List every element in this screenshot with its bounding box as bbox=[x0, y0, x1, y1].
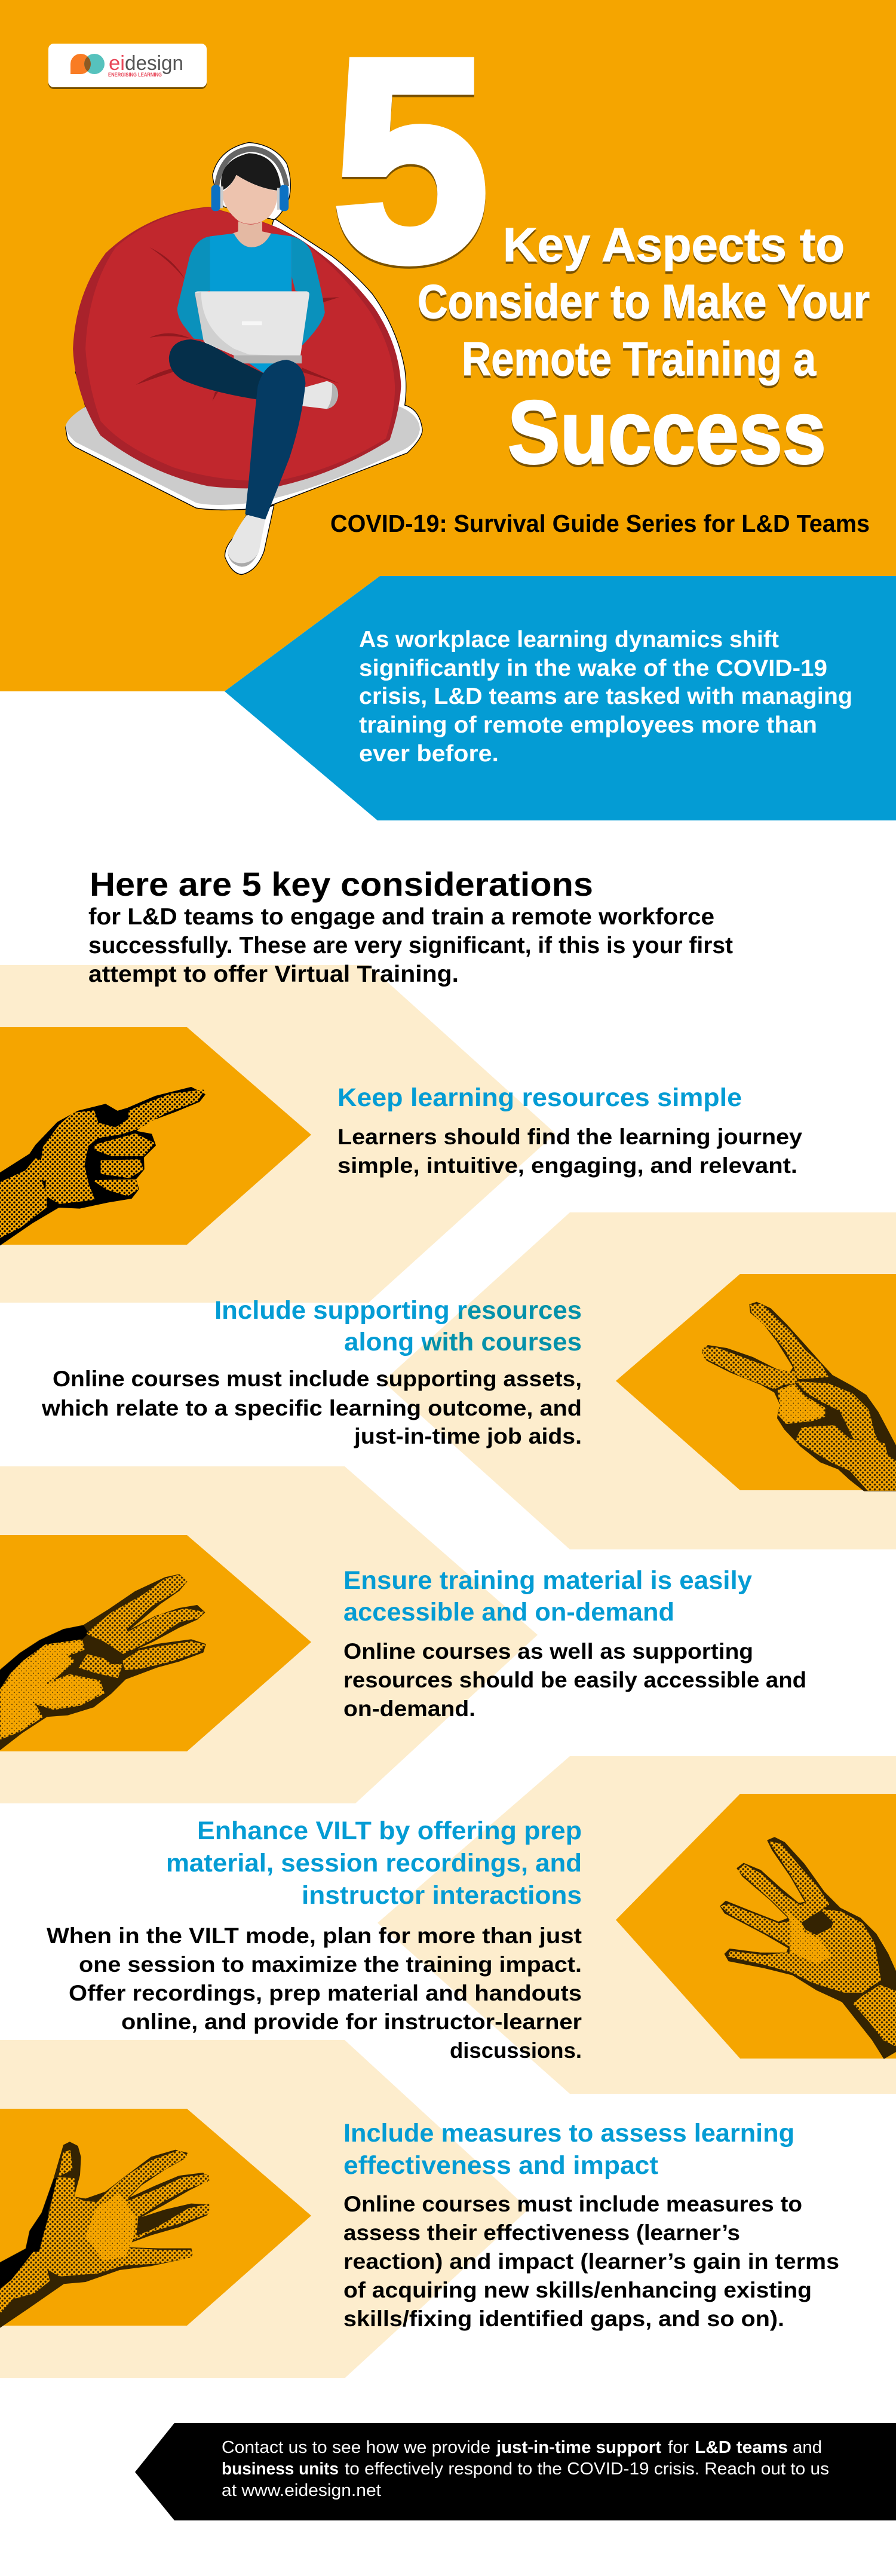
panel: item 4 orange chevron with hand bbox=[616, 1794, 896, 2059]
heading: Include measures to assess learning bbox=[343, 2119, 794, 2148]
heading: Ensure training material is easily bbox=[343, 1566, 752, 1595]
panel: footer call to action bbox=[135, 2423, 896, 2520]
icon: open hand with four fingers bbox=[720, 1837, 896, 2059]
heading: instructor interactions bbox=[302, 1881, 582, 1910]
panel: intro blue banner bbox=[225, 576, 896, 820]
body: When in the VILT mode, plan for more than just bbox=[47, 1923, 582, 1948]
chevron: item 4 background bbox=[378, 1756, 896, 2094]
logo: ENERGISING LEARNING bbox=[108, 72, 162, 78]
panel: item 3 orange chevron with hand bbox=[0, 1535, 311, 1751]
intro text: attempt to offer Virtual Training. bbox=[88, 961, 459, 987]
panel: footer call to action: L&D teams bbox=[695, 2438, 788, 2457]
panel: item 5 orange chevron with hand bbox=[0, 2109, 311, 2327]
intro text bbox=[88, 904, 733, 987]
body: Online courses must include measures to bbox=[343, 2192, 802, 2216]
body: resources should be easily accessible and bbox=[343, 1668, 806, 1692]
title bbox=[332, 0, 870, 482]
title line 4: Success: Success bbox=[508, 382, 826, 482]
illustration: person on bean bag with laptop bbox=[65, 142, 422, 575]
icon: open hand with thumb bbox=[0, 2142, 209, 2327]
subtitle: COVID-19: Survival Guide Series for L&D Teams bbox=[330, 510, 870, 537]
body: on-demand. bbox=[343, 1696, 475, 1721]
panel: intro blue banner: crisis, L&D teams are tasked with managing bbox=[359, 684, 852, 709]
body: assess their effectiveness (learner’s bbox=[343, 2220, 740, 2245]
icon: pointing hand bbox=[0, 1088, 205, 1245]
body: simple, intuitive, engaging, and relevant. bbox=[337, 1153, 797, 1178]
intro heading block bbox=[88, 865, 733, 987]
panel: intro blue banner: As workplace learning dynamics shift bbox=[359, 627, 779, 653]
intro text: successfully. These are very significant, if this is your first bbox=[88, 933, 733, 958]
panel: footer call to action: for bbox=[668, 2438, 689, 2457]
heading: Enhance VILT by offering prep bbox=[197, 1817, 582, 1845]
logo: design bbox=[125, 52, 183, 75]
orange header background bbox=[0, 0, 896, 691]
panel: footer call to action: Contact us to see how we provide bbox=[222, 2438, 490, 2457]
panel: intro blue banner: significantly in the wake of the COVID-19 bbox=[359, 656, 827, 681]
icon: two fingers hand bbox=[702, 1302, 896, 1491]
big number 5: 5 bbox=[332, 0, 489, 321]
panel: footer call to action: and bbox=[793, 2438, 822, 2457]
heading: accessible and on-demand bbox=[343, 1598, 674, 1627]
heading bbox=[343, 1566, 752, 1627]
heading: Keep learning resources simple bbox=[337, 1083, 742, 1112]
panel: footer call to action: business units bbox=[222, 2459, 339, 2479]
body: of acquiring new skills/enhancing existing bbox=[343, 2278, 812, 2302]
logo: ei bbox=[109, 52, 125, 75]
chevron: item 2 background bbox=[383, 1212, 896, 1549]
body: skills/fixing identified gaps, and so on). bbox=[343, 2307, 784, 2331]
heading: Here are 5 key considerations bbox=[90, 865, 593, 903]
heading bbox=[214, 1296, 582, 1356]
heading: effectiveness and impact bbox=[343, 2151, 658, 2180]
logo bbox=[48, 44, 207, 89]
body: reaction) and impact (learner’s gain in terms bbox=[343, 2249, 839, 2274]
text: item 2 bbox=[41, 1296, 582, 1448]
heading: material, session recordings, and bbox=[166, 1849, 582, 1877]
panel: item 1 orange chevron with hand bbox=[0, 1027, 311, 1245]
chevron: item 3 background bbox=[0, 1466, 538, 1803]
panel: footer call to action: to effectively respond to the COVID-19 crisis. Reach out to us bbox=[345, 2459, 829, 2479]
heading bbox=[343, 2119, 794, 2180]
heading bbox=[166, 1817, 582, 1910]
icon: three fingers hand bbox=[0, 1575, 205, 1750]
panel: item 2 orange chevron with hand bbox=[616, 1274, 896, 1491]
body bbox=[343, 1639, 806, 1721]
body: just-in-time job aids. bbox=[354, 1424, 582, 1448]
body: Online courses must include supporting assets, bbox=[53, 1367, 582, 1391]
title line 3: Remote Training a bbox=[462, 332, 816, 385]
heading: along with courses bbox=[344, 1328, 582, 1356]
text: item 1 bbox=[337, 1083, 802, 1178]
body: Offer recordings, prep material and handouts bbox=[69, 1981, 582, 2005]
text: item 4 bbox=[47, 1817, 582, 2063]
body bbox=[343, 2192, 839, 2331]
title line 1: Key Aspects to bbox=[503, 218, 845, 271]
body: discussions. bbox=[450, 2038, 582, 2063]
body bbox=[337, 1125, 802, 1178]
chevron: item 5 background bbox=[0, 2040, 529, 2378]
text: item 3 bbox=[343, 1566, 806, 1721]
body bbox=[47, 1923, 582, 2063]
body: one session to maximize the training impact. bbox=[79, 1952, 582, 1977]
intro text: for L&D teams to engage and train a remote workforce bbox=[88, 904, 714, 930]
body: Online courses as well as supporting bbox=[343, 1639, 753, 1664]
panel: intro blue banner: training of remote employees more than bbox=[359, 712, 817, 738]
body bbox=[41, 1367, 582, 1448]
chevron: item 1 background bbox=[0, 965, 556, 1303]
panel: footer call to action: at www.eidesign.net bbox=[222, 2481, 381, 2500]
heading: Include supporting resources bbox=[214, 1296, 582, 1325]
body: Learners should find the learning journey bbox=[337, 1125, 802, 1149]
panel: intro blue banner: ever before. bbox=[359, 741, 499, 767]
text: item 5 bbox=[343, 2119, 839, 2331]
body: online, and provide for instructor-learner bbox=[121, 2010, 582, 2034]
panel: footer call to action: just-in-time support bbox=[496, 2438, 661, 2457]
body: which relate to a specific learning outcome, and bbox=[41, 1396, 582, 1420]
